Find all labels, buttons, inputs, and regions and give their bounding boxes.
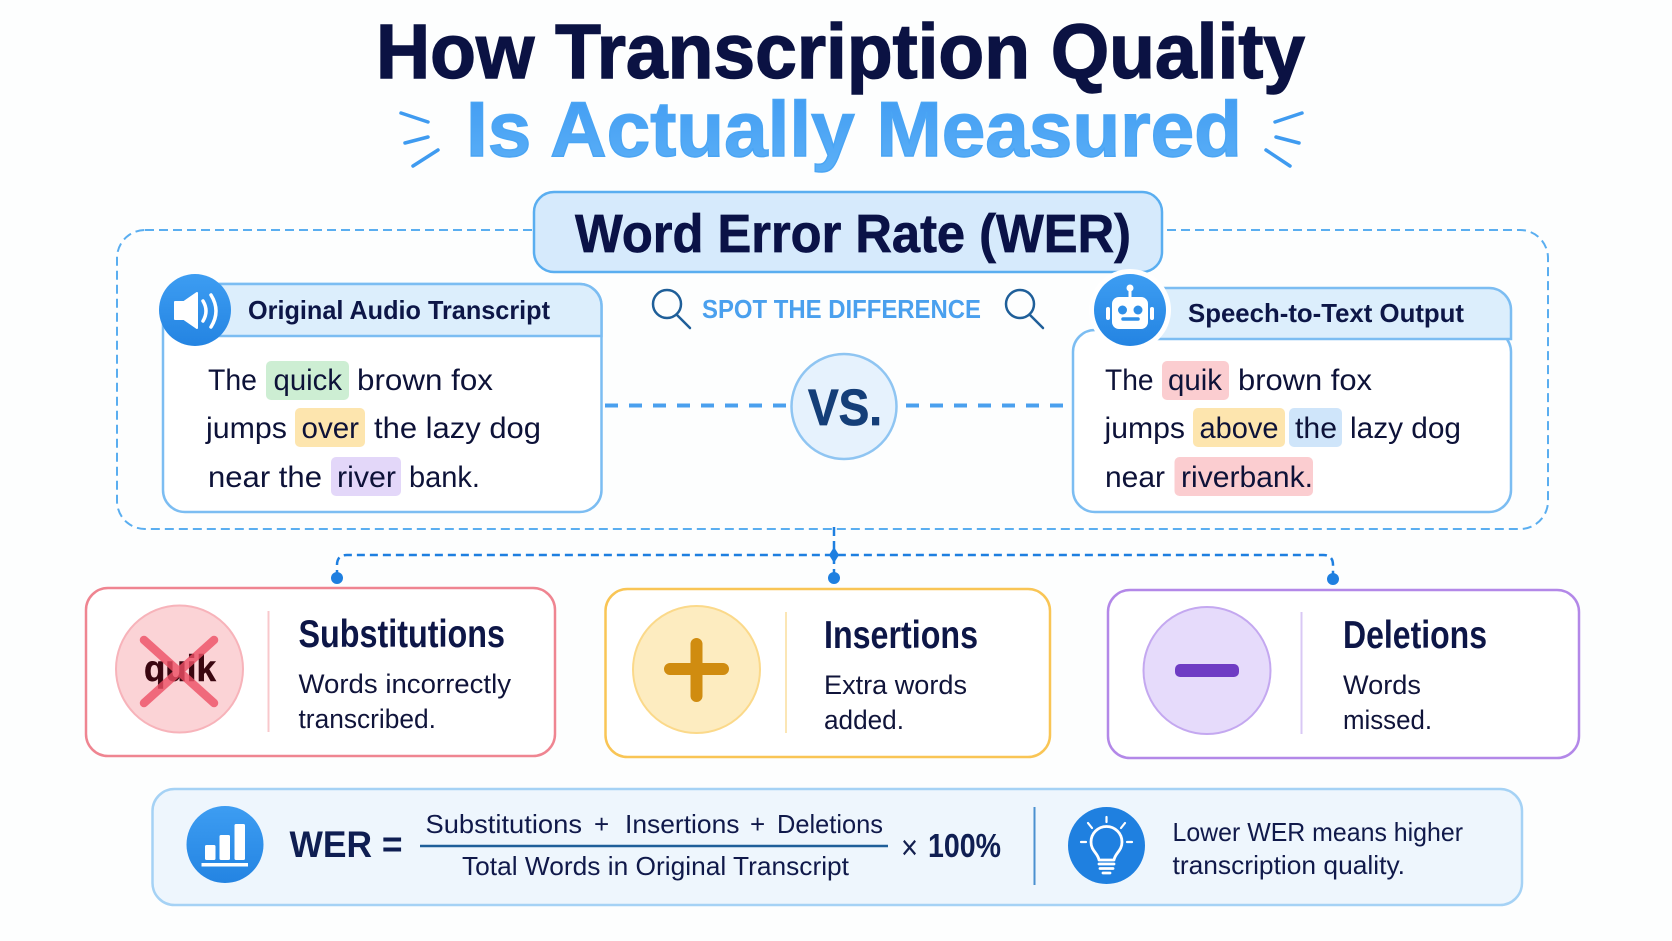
panel: WER comparison dashed frame [117, 230, 1548, 529]
formula fraction: Deletions [777, 809, 883, 839]
text: deletions description: missed. [1343, 705, 1432, 735]
transcript text with highlights: river [337, 461, 396, 494]
transcript text with highlights: jumps [205, 412, 287, 445]
text: substitutions description: transcribed. [298, 704, 436, 734]
transcript text with highlights: bank. [409, 461, 480, 494]
card header [1130, 288, 1511, 339]
icon: plus [633, 606, 760, 733]
VS badge: VS. [808, 379, 882, 436]
icon: magnifier right [1006, 290, 1043, 328]
formula fraction: + [594, 809, 609, 839]
text: substitutions description [298, 669, 511, 734]
transcript text with highlights: over [302, 412, 359, 445]
icon: minus [1144, 607, 1270, 734]
icon: magnifier left [653, 290, 690, 328]
transcript text with highlights: the lazy dog [374, 412, 541, 445]
icon: left sparkle [401, 113, 438, 166]
text: takeaway: transcription quality. [1172, 850, 1405, 880]
text: substitutions heading: Substitutions [298, 613, 505, 656]
transcript text with highlights: lazy dog [1350, 412, 1461, 445]
transcript text with highlights: above [1200, 412, 1278, 445]
card header [195, 284, 602, 336]
formula fraction: Total Words in Original Transcript [462, 851, 850, 881]
icon: robot [1089, 269, 1171, 351]
label: spot the difference: SPOT THE DIFFERENCE [702, 294, 981, 324]
transcript text with highlights: quik [1168, 364, 1223, 397]
title: Is Actually Measured [466, 85, 1242, 173]
connector: left to VS [605, 404, 786, 408]
transcript text with highlights: near the [208, 461, 322, 494]
panel: insertions [606, 589, 1050, 757]
text: deletions description: Words [1343, 670, 1421, 700]
card title: Speech-to-Text Output [1188, 298, 1464, 328]
formula multiplier: × [901, 829, 918, 867]
heading: Word Error Rate: Word Error Rate (WER) [575, 204, 1131, 264]
connector: tree to error cards [331, 527, 1339, 585]
transcript text with highlights: The [208, 364, 257, 397]
icon: right sparkle [1266, 113, 1302, 166]
icon: speaker [159, 274, 231, 346]
panel: deletions [1108, 590, 1579, 758]
panel: substitutions [86, 588, 555, 756]
text: insertions description [824, 670, 967, 735]
transcript text with highlights: the [1295, 412, 1337, 445]
transcript text with highlights: brown fox [1238, 364, 1372, 397]
connector: VS to right [906, 404, 1064, 408]
transcript text with highlights [1103, 361, 1461, 496]
transcript text with highlights: riverbank. [1181, 461, 1313, 494]
text: insertions description: added. [824, 705, 904, 735]
title: How Transcription Quality [376, 9, 1305, 95]
panel: formula [152, 789, 1522, 905]
text: takeaway: Lower WER means higher [1172, 817, 1463, 847]
text: substitutions description: Words incorrectly [298, 669, 511, 699]
text: deletions description [1343, 670, 1432, 735]
formula fraction: Substitutions [426, 809, 582, 839]
transcript text with highlights: quick [274, 364, 343, 397]
formula fraction: Insertions [625, 809, 740, 839]
transcript text with highlights: near [1105, 461, 1165, 494]
transcript text with highlights: brown fox [357, 364, 493, 397]
transcript text with highlights: jumps [1103, 412, 1185, 445]
icon: light bulb [1068, 807, 1145, 884]
formula fraction [420, 809, 888, 881]
text: insertions description: Extra words [824, 670, 967, 700]
text: takeaway [1172, 817, 1463, 880]
icon: crossed-out word [116, 606, 243, 732]
VS badge [792, 354, 896, 459]
icon: crossed-out word: quik [144, 648, 216, 689]
panel: speech-to-text output [1073, 269, 1511, 512]
icon: bar chart [186, 806, 264, 883]
formula multiplier [901, 827, 1001, 867]
transcript text with highlights [205, 361, 541, 496]
formula label: WER = [290, 824, 402, 865]
card title: Original Audio Transcript [248, 295, 550, 325]
text: insertions heading: Insertions [824, 614, 978, 657]
panel: original audio transcript [159, 274, 602, 512]
transcript text with highlights: The [1105, 364, 1154, 397]
title [376, 9, 1305, 173]
formula multiplier: 100% [928, 827, 1001, 864]
formula fraction: + [750, 809, 765, 839]
heading: Word Error Rate [534, 192, 1162, 272]
text: deletions heading: Deletions [1343, 614, 1487, 657]
